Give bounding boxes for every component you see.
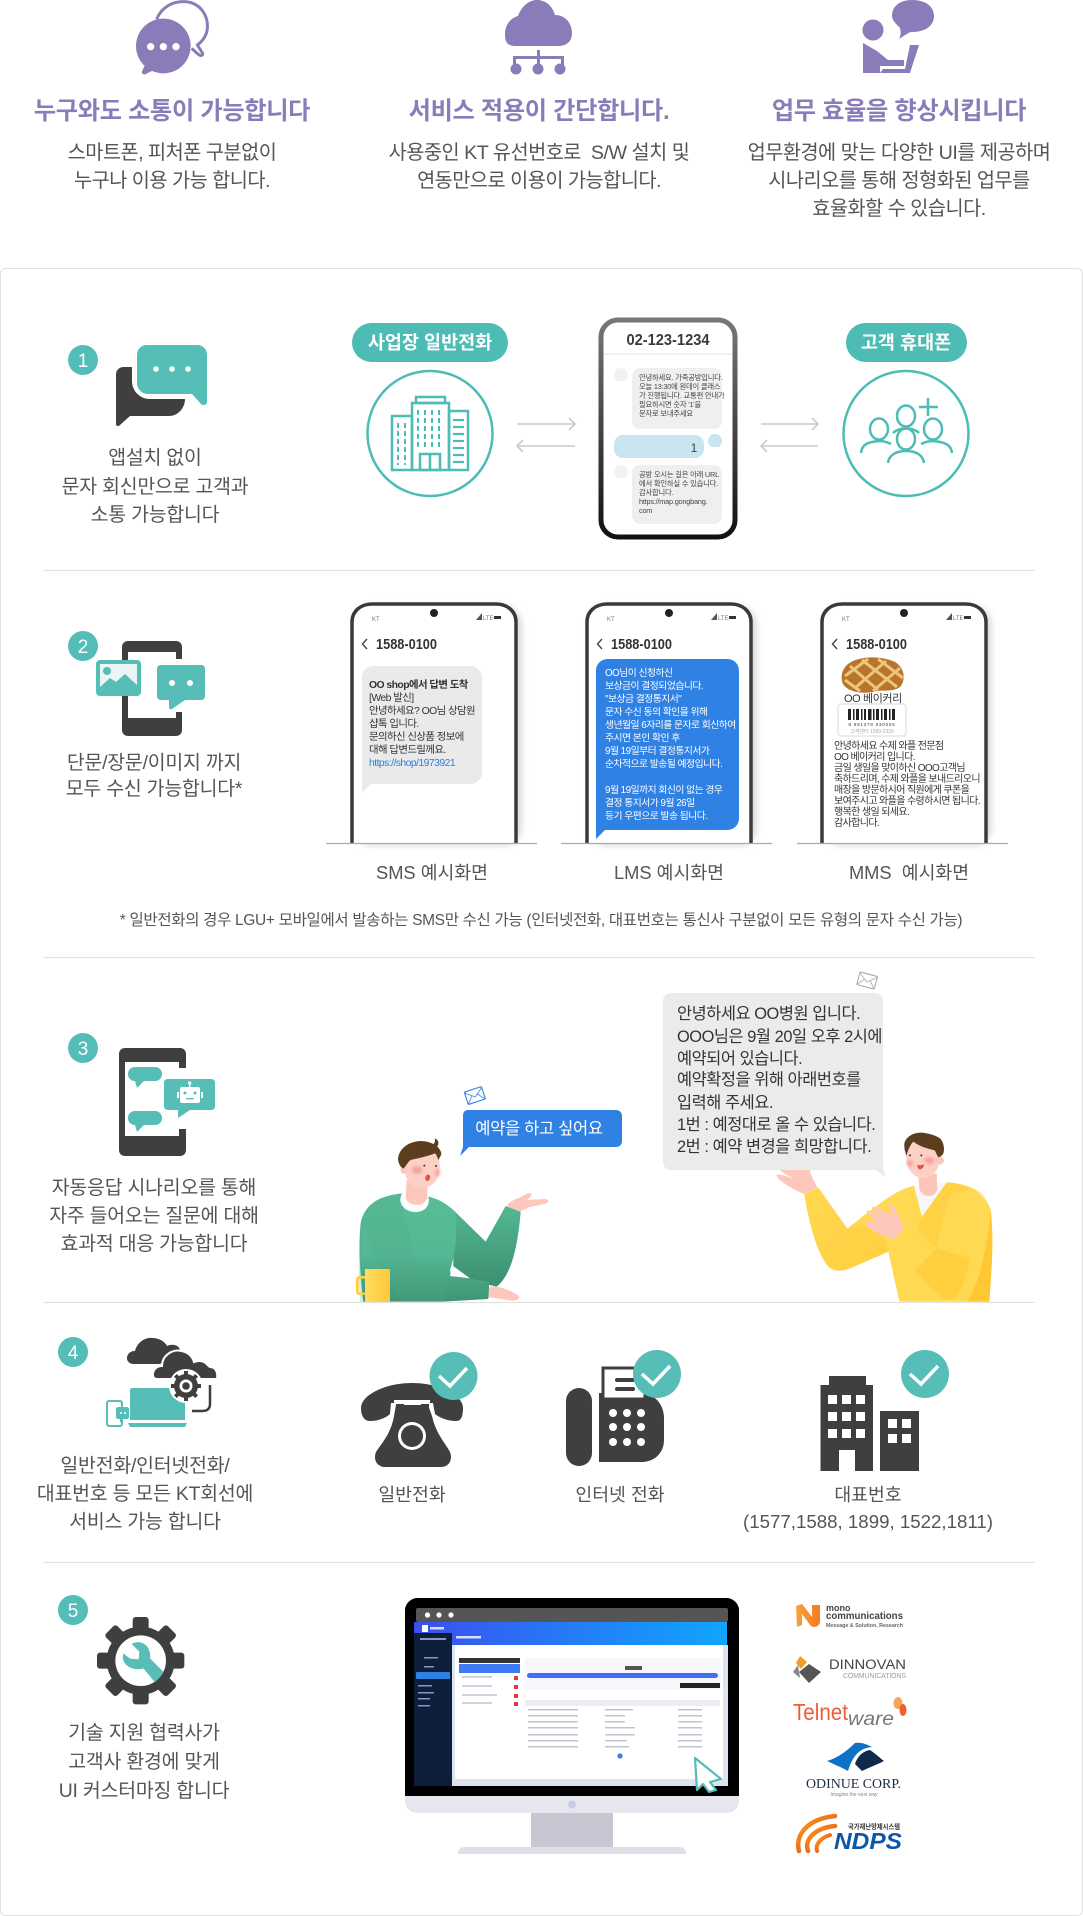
caption: representative number: (1577,1588, 1899, 1522,1811) bbox=[743, 1511, 993, 1532]
phone: SMS example: 샵톡 입니다. bbox=[369, 717, 419, 730]
phone: LMS example: 문자 수신 동의 확인을 위해 bbox=[605, 705, 708, 718]
logo: Telnetware: Telnet bbox=[793, 1699, 849, 1725]
text block: section 1: 앱설치 없이 bbox=[108, 447, 202, 469]
callout: hospital reply: 안녕하세요 OO병원 입니다. bbox=[677, 1005, 860, 1023]
phone: LMS example: "보상금 결정통지서" bbox=[605, 693, 682, 705]
section 4 number badge: 4 bbox=[68, 1343, 79, 1364]
phone: MMS example: 1588-0100 bbox=[846, 637, 907, 653]
section 1 number badge bbox=[68, 345, 98, 375]
section 5 number badge: 5 bbox=[68, 1601, 78, 1622]
text block: communicate: 스마트폰, 피처폰 구분없이 bbox=[68, 142, 276, 164]
text block: simple adoption: 사용중인 KT 유선번호로 S/W 설치 및 bbox=[389, 142, 689, 164]
text block: section 1 bbox=[62, 447, 249, 526]
phone: two-way messages: 1 bbox=[691, 441, 698, 455]
phone: LMS example: 순차적으로 발송될 예정입니다. bbox=[605, 757, 722, 770]
pill: business landline: 사업장 일반전화 bbox=[368, 332, 492, 353]
section 3 number badge bbox=[68, 1033, 98, 1063]
section 1 number badge: 1 bbox=[78, 351, 88, 372]
text block: section 5: 기술 지원 협력사가 bbox=[68, 1722, 220, 1744]
phone: LMS example: KT bbox=[607, 617, 615, 623]
callout: hospital reply: 입력해 주세요. bbox=[677, 1094, 773, 1112]
icon: people in circle bbox=[844, 371, 968, 496]
text block: section 5 bbox=[59, 1722, 230, 1802]
text block: section 1: 문자 회신만으로 고객과 bbox=[62, 476, 249, 498]
arrows: left exchange bbox=[517, 418, 575, 452]
logo: NDPS: NDPS bbox=[834, 1828, 903, 1854]
caption: LMS: LMS 예시화면 bbox=[614, 862, 724, 883]
section 5 number badge bbox=[58, 1595, 88, 1625]
text block: efficiency: 업무환경에 맞는 다양한 UI를 제공하며 bbox=[748, 142, 1050, 164]
logo: Telnetware: ware bbox=[848, 1709, 894, 1730]
caption: representative number bbox=[743, 1484, 993, 1532]
callout: hospital reply: 예약확정을 위해 아래번호를 bbox=[677, 1071, 861, 1089]
heading: communicate: 누구와도 소통이 가능합니다 bbox=[34, 98, 310, 125]
phone: two-way messages: 감사합니다. bbox=[639, 488, 674, 497]
phone: two-way messages: 공방 오시는 길은 아래 URL bbox=[639, 470, 719, 479]
text block: communicate: 누구나 이용 가능 합니다. bbox=[74, 170, 270, 192]
text block: simple adoption bbox=[389, 142, 689, 192]
phone: LMS example: 9월 19일까지 회신이 없는 경우 bbox=[605, 783, 723, 796]
phone: two-way messages: com bbox=[639, 506, 652, 515]
phone: SMS example: 대해 답변드릴께요. bbox=[369, 743, 446, 756]
caption: representative number: 대표번호 bbox=[834, 1484, 902, 1505]
icon: purple cloud network bbox=[505, 0, 572, 74]
pill: customer mobile bbox=[846, 323, 967, 362]
text block: section 4: 대표번호 등 모든 KT회선에 bbox=[37, 1483, 253, 1505]
icon: rotary telephone with check bbox=[361, 1352, 478, 1467]
icon: purple chat bubbles bbox=[136, 2, 207, 74]
phone: LMS example: 주시면 본인 확인 후 bbox=[605, 732, 680, 744]
phone: LMS example: 등기 우편으로 발송 됩니다. bbox=[605, 809, 708, 822]
text block: section 2: 모두 수신 가능합니다* bbox=[66, 778, 243, 800]
callout: hospital reply bbox=[663, 993, 886, 1178]
phone: MMS example: OO 베이커리 bbox=[844, 692, 902, 705]
phone: SMS example: KT bbox=[372, 617, 380, 623]
logo: mono communications bbox=[796, 1603, 904, 1629]
phone: SMS example: 문의하신 신상품 정보에 bbox=[369, 730, 464, 743]
monitor with admin screen bbox=[405, 1598, 739, 1854]
text block: section 4: 일반전화/인터넷전화/ bbox=[60, 1455, 230, 1477]
pill: business landline bbox=[352, 323, 508, 362]
icon: blue envelope bbox=[464, 1087, 485, 1104]
callout: customer message bbox=[460, 1110, 622, 1156]
callout: hospital reply: OOO님은 9월 20일 오후 2시에 bbox=[677, 1028, 882, 1046]
phone: MMS example: LTE bbox=[953, 616, 964, 622]
phone: MMS example: KT bbox=[842, 617, 850, 623]
heading: efficiency: 업무 효율을 향상시킵니다 bbox=[772, 98, 1026, 125]
caption: MMS: MMS 예시화면 bbox=[849, 862, 969, 883]
text block: section 3 bbox=[49, 1177, 259, 1255]
logo: NDPS bbox=[798, 1816, 903, 1854]
phone: LMS example: 결정 통지서가 9월 26일 bbox=[605, 797, 695, 809]
text block: section 3: 효과적 대응 가능합니다 bbox=[61, 1233, 248, 1255]
illustration: man in yellow sweater bbox=[777, 1133, 992, 1302]
caption: SMS: SMS 예시화면 bbox=[376, 862, 488, 883]
logo: mono communications: mono bbox=[826, 1603, 851, 1613]
callout: hospital reply: 2번 : 예약 변경을 희망합니다. bbox=[677, 1138, 871, 1156]
icon: grey envelope bbox=[857, 972, 878, 989]
logo: mono communications: Message & Solution, Research bbox=[826, 1623, 904, 1629]
section 4 number badge bbox=[58, 1337, 88, 1367]
logo: mono communications: communications bbox=[826, 1611, 903, 1622]
logo: Dinnovan: DINNOVAN bbox=[829, 1657, 906, 1672]
logo: NDPS: 국가재난망제시스템 bbox=[848, 1822, 900, 1831]
phone: two-way messages: 가 진행됩니다. 교통편 안내가 bbox=[639, 391, 725, 400]
phone: MMS example: 보여주시고 와플을 수령하시면 됩니다. bbox=[834, 794, 980, 807]
phone: MMS example: 감사합니다. bbox=[834, 817, 879, 829]
phone: two-way messages: 문자로 보내주세요 bbox=[639, 409, 693, 418]
callout: hospital reply: 1번 : 예정대로 올 수 있습니다. bbox=[677, 1116, 875, 1134]
illustration: man in green sweater bbox=[356, 1138, 548, 1302]
pill: customer mobile: 고객 휴대폰 bbox=[861, 332, 951, 353]
heading: simple adoption: 서비스 적용이 간단합니다. bbox=[409, 98, 669, 125]
phone: LMS example: OO님이 신청하신 bbox=[605, 666, 673, 679]
caption: internet phone: 인터넷 전화 bbox=[575, 1484, 665, 1505]
phone: SMS example: OO shop에서 답변 도착 bbox=[369, 678, 469, 691]
text block: efficiency bbox=[748, 142, 1050, 220]
logo: Dinnovan: COMMUNICATIONS bbox=[843, 1673, 906, 1680]
phone: two-way messages: 안녕하세요. 가죽공방입니다. bbox=[639, 373, 723, 382]
icon: two chat bubbles bbox=[116, 345, 207, 426]
caption: landline: 일반전화 bbox=[378, 1484, 446, 1505]
phone: MMS example: 안녕하세요 수제 와플 전문점 bbox=[834, 739, 943, 752]
text block: section 4 bbox=[37, 1455, 253, 1533]
section 2 number badge: 2 bbox=[78, 637, 88, 658]
icon: building in circle bbox=[368, 371, 492, 496]
footnote: * 일반전화의 경우 LGU+ 모바일에서 발송하는 SMS만 수신 가능 (인터넷전화, 대표번호는 통신사 구분없이 모든 유형의 문자 수신 가능) bbox=[120, 911, 962, 929]
logo: Odinue Corp bbox=[806, 1743, 901, 1798]
arrows: right exchange bbox=[761, 418, 818, 452]
text block: section 3: 자동응답 시나리오를 통해 bbox=[52, 1177, 256, 1199]
icon: purple person with laptop and speech bubble bbox=[862, 0, 934, 73]
image: barcode coupon: 8 881378 030005 bbox=[848, 722, 896, 727]
phone: LMS example: 1588-0100 bbox=[611, 637, 672, 653]
icon: office buildings with check bbox=[820, 1350, 949, 1471]
logo: Odinue Corp: ODINUE CORP. bbox=[806, 1777, 901, 1792]
phone: MMS example: 금일 생일을 맞이하신 OOO고객님 bbox=[834, 761, 965, 774]
phone: SMS example: LTE bbox=[483, 616, 494, 622]
phone: LMS example bbox=[561, 604, 772, 846]
text block: section 2 bbox=[66, 752, 243, 800]
image: barcode coupon bbox=[838, 704, 906, 736]
phone: MMS example: OO 베이커리 입니다. bbox=[834, 750, 915, 763]
phone: LMS example: 생년월일 6자리를 문자로 회신하여 bbox=[605, 718, 736, 731]
image: barcode coupon: 고객센터 1599-2320 bbox=[850, 728, 894, 735]
phone: MMS example bbox=[797, 604, 1008, 846]
text block: efficiency: 효율화할 수 있습니다. bbox=[812, 198, 986, 220]
phone: two-way messages bbox=[601, 320, 735, 537]
text block: section 5: UI 커스터마징 합니다 bbox=[59, 1780, 230, 1802]
logo: Telnetware bbox=[793, 1697, 906, 1730]
phone: SMS example: 1588-0100 bbox=[376, 637, 437, 653]
phone: two-way messages: 오늘 13:30에 원데이 클래스 bbox=[639, 382, 721, 391]
phone: SMS example: https://shop/1973921 bbox=[369, 758, 456, 769]
phone: SMS example: 안녕하세요? OO님 상담원 bbox=[369, 704, 475, 717]
phone: MMS example: 행복한 생일 되세요. bbox=[834, 806, 909, 818]
phone: MMS example: 축하드리며, 수제 와플을 보내드리오니 bbox=[834, 772, 980, 785]
phone: two-way messages: 필요하시면 숫자 '1'을 bbox=[639, 400, 701, 409]
phone: MMS example: 매장을 방문하시어 직원에게 쿠폰을 bbox=[834, 783, 970, 796]
icon: fax machine with check bbox=[566, 1350, 681, 1466]
phone: two-way messages: https://map.gongbang. bbox=[639, 497, 708, 506]
phone: SMS example bbox=[326, 604, 537, 846]
image: waffle bbox=[842, 657, 904, 693]
text block: section 4: 서비스 가능 합니다 bbox=[69, 1511, 221, 1533]
phone: two-way messages: 02-123-1234 bbox=[626, 332, 710, 349]
text block: efficiency: 시나리오를 통해 정형화된 업무를 bbox=[768, 170, 1030, 192]
phone: SMS example: [Web 발신] bbox=[369, 692, 414, 704]
icon: phone with image and message bbox=[96, 641, 205, 736]
phone: LMS example: LTE bbox=[718, 616, 729, 622]
logo: Dinnovan bbox=[793, 1656, 906, 1683]
logo: Odinue Corp: Imagine the next way bbox=[830, 1792, 878, 1798]
icon: phone with chatbot bbox=[119, 1048, 215, 1156]
callout: customer message: 예약을 하고 싶어요 bbox=[475, 1119, 603, 1138]
section 2 number badge bbox=[68, 631, 98, 661]
icon: gear and wrench bbox=[97, 1617, 184, 1704]
phone: two-way messages: 에서 확인하실 수 있습니다. bbox=[639, 479, 718, 488]
text block: simple adoption: 연동만으로 이용이 가능합니다. bbox=[417, 170, 661, 192]
section 3 number badge: 3 bbox=[78, 1039, 88, 1060]
phone: LMS example: 보상금이 결정되었습니다. bbox=[605, 680, 703, 692]
icon: mouse cursor bbox=[695, 1758, 721, 1792]
phone: LMS example: 9월 19일부터 결정통지서가 bbox=[605, 745, 710, 757]
icon: cloud, devices and gear bbox=[107, 1338, 217, 1427]
text block: section 3: 자주 들어오는 질문에 대해 bbox=[49, 1205, 259, 1227]
text block: section 5: 고객사 환경에 맞게 bbox=[68, 1751, 220, 1773]
text block: section 1: 소통 가능합니다 bbox=[91, 504, 220, 526]
callout: hospital reply: 예약되어 있습니다. bbox=[677, 1050, 802, 1068]
text block: communicate bbox=[68, 142, 276, 192]
text block: section 2: 단문/장문/이미지 까지 bbox=[67, 752, 241, 774]
